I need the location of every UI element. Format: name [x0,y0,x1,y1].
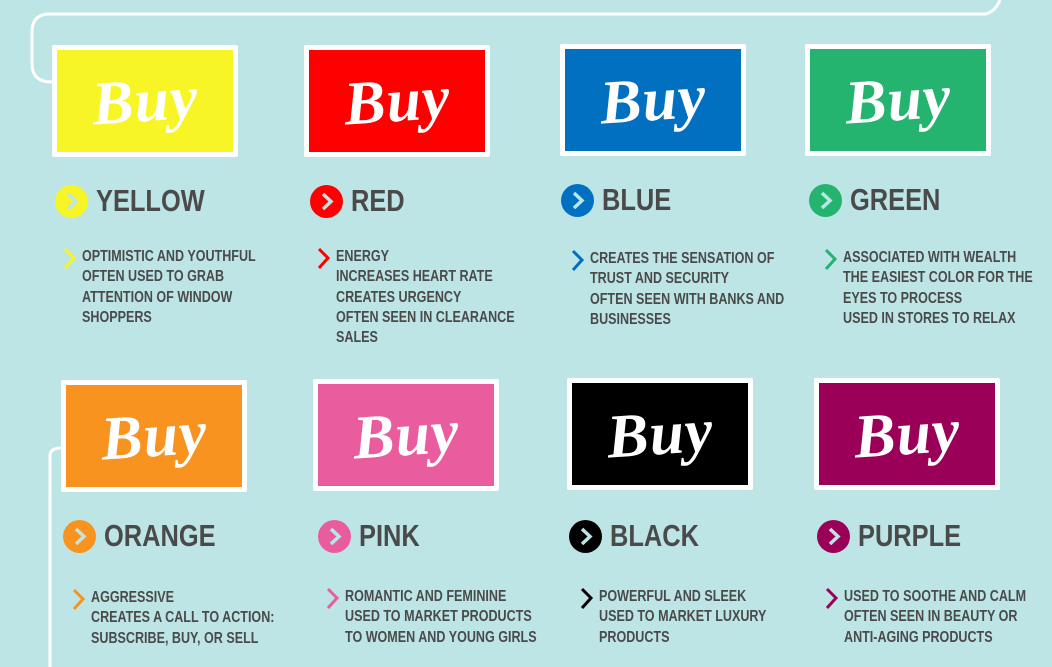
text: black: POWERFUL AND SLEEK [599,588,746,605]
card: pink: Buy [351,397,461,472]
card: red: Buy [342,63,452,138]
text: yellow: OFTEN USED TO GRAB [82,268,224,285]
text: orange: AGGRESSIVE [91,589,174,606]
text: green [825,249,1033,327]
heading: blue: BLUE [602,182,671,217]
heading: pink [318,518,420,553]
heading: purple: PURPLE [858,518,961,553]
heading: green: GREEN [850,182,940,217]
text: pink: TO WOMEN AND YOUNG GIRLS [345,629,537,646]
text: orange: CREATES A CALL TO ACTION: [91,609,274,626]
text: orange: SUBSCRIBE, BUY, OR SELL [91,630,258,647]
text: red [318,248,515,346]
card: orange [61,380,247,492]
text: red: INCREASES HEART RATE [336,268,493,285]
text: yellow: SHOPPERS [82,309,152,326]
text: green: EYES TO PROCESS [843,290,962,307]
card: yellow [52,45,238,157]
heading: black: BLACK [610,518,699,553]
text: red: ENERGY [336,248,389,265]
text: green: USED IN STORES TO RELAX [843,310,1016,327]
text: black: PRODUCTS [599,629,669,646]
card: purple [814,378,1000,490]
text: red: OFTEN SEEN IN CLEARANCE [336,309,515,326]
heading: pink: PINK [359,518,420,553]
heading: blue [561,182,671,217]
text: yellow: ATTENTION OF WINDOW [82,289,232,306]
card: black: Buy [605,396,715,471]
text: red: SALES [336,329,378,346]
text: pink: USED TO MARKET PRODUCTS [345,608,532,625]
text: pink [327,588,537,646]
text: yellow: OPTIMISTIC AND YOUTHFUL [82,248,256,265]
card: green: Buy [843,62,953,137]
text: blue: BUSINESSES [590,311,671,328]
heading: green [809,182,940,217]
heading: yellow: YELLOW [96,183,205,218]
text: green: THE EASIEST COLOR FOR THE [843,269,1033,286]
card: blue: Buy [598,62,708,137]
card: red [304,45,490,157]
text: blue: TRUST AND SECURITY [590,270,729,287]
text: pink: ROMANTIC AND FEMININE [345,588,506,605]
text: black [581,588,766,646]
card: orange: Buy [99,398,209,473]
text: green: ASSOCIATED WITH WEALTH [843,249,1016,266]
card: pink [313,379,499,491]
text: blue: CREATES THE SENSATION OF [590,250,774,267]
heading: black [569,518,699,553]
text: purple: OFTEN SEEN IN BEAUTY OR [844,608,1017,625]
card: green [805,44,991,156]
text: orange [73,589,274,647]
text: purple: ANTI-AGING PRODUCTS [844,629,993,646]
text: yellow [64,248,256,326]
heading: red: RED [351,183,405,218]
text: black: USED TO MARKET LUXURY [599,608,766,625]
text: red: CREATES URGENCY [336,289,461,306]
text: blue: OFTEN SEEN WITH BANKS AND [590,291,784,308]
card: black [567,378,753,490]
heading: red [310,183,405,218]
card: purple: Buy [852,396,962,471]
heading: orange: ORANGE [104,518,216,553]
text: purple: USED TO SOOTHE AND CALM [844,588,1026,605]
text: blue [572,250,784,328]
text: purple [826,588,1026,646]
card: yellow: Buy [90,63,200,138]
card: blue [560,44,746,156]
